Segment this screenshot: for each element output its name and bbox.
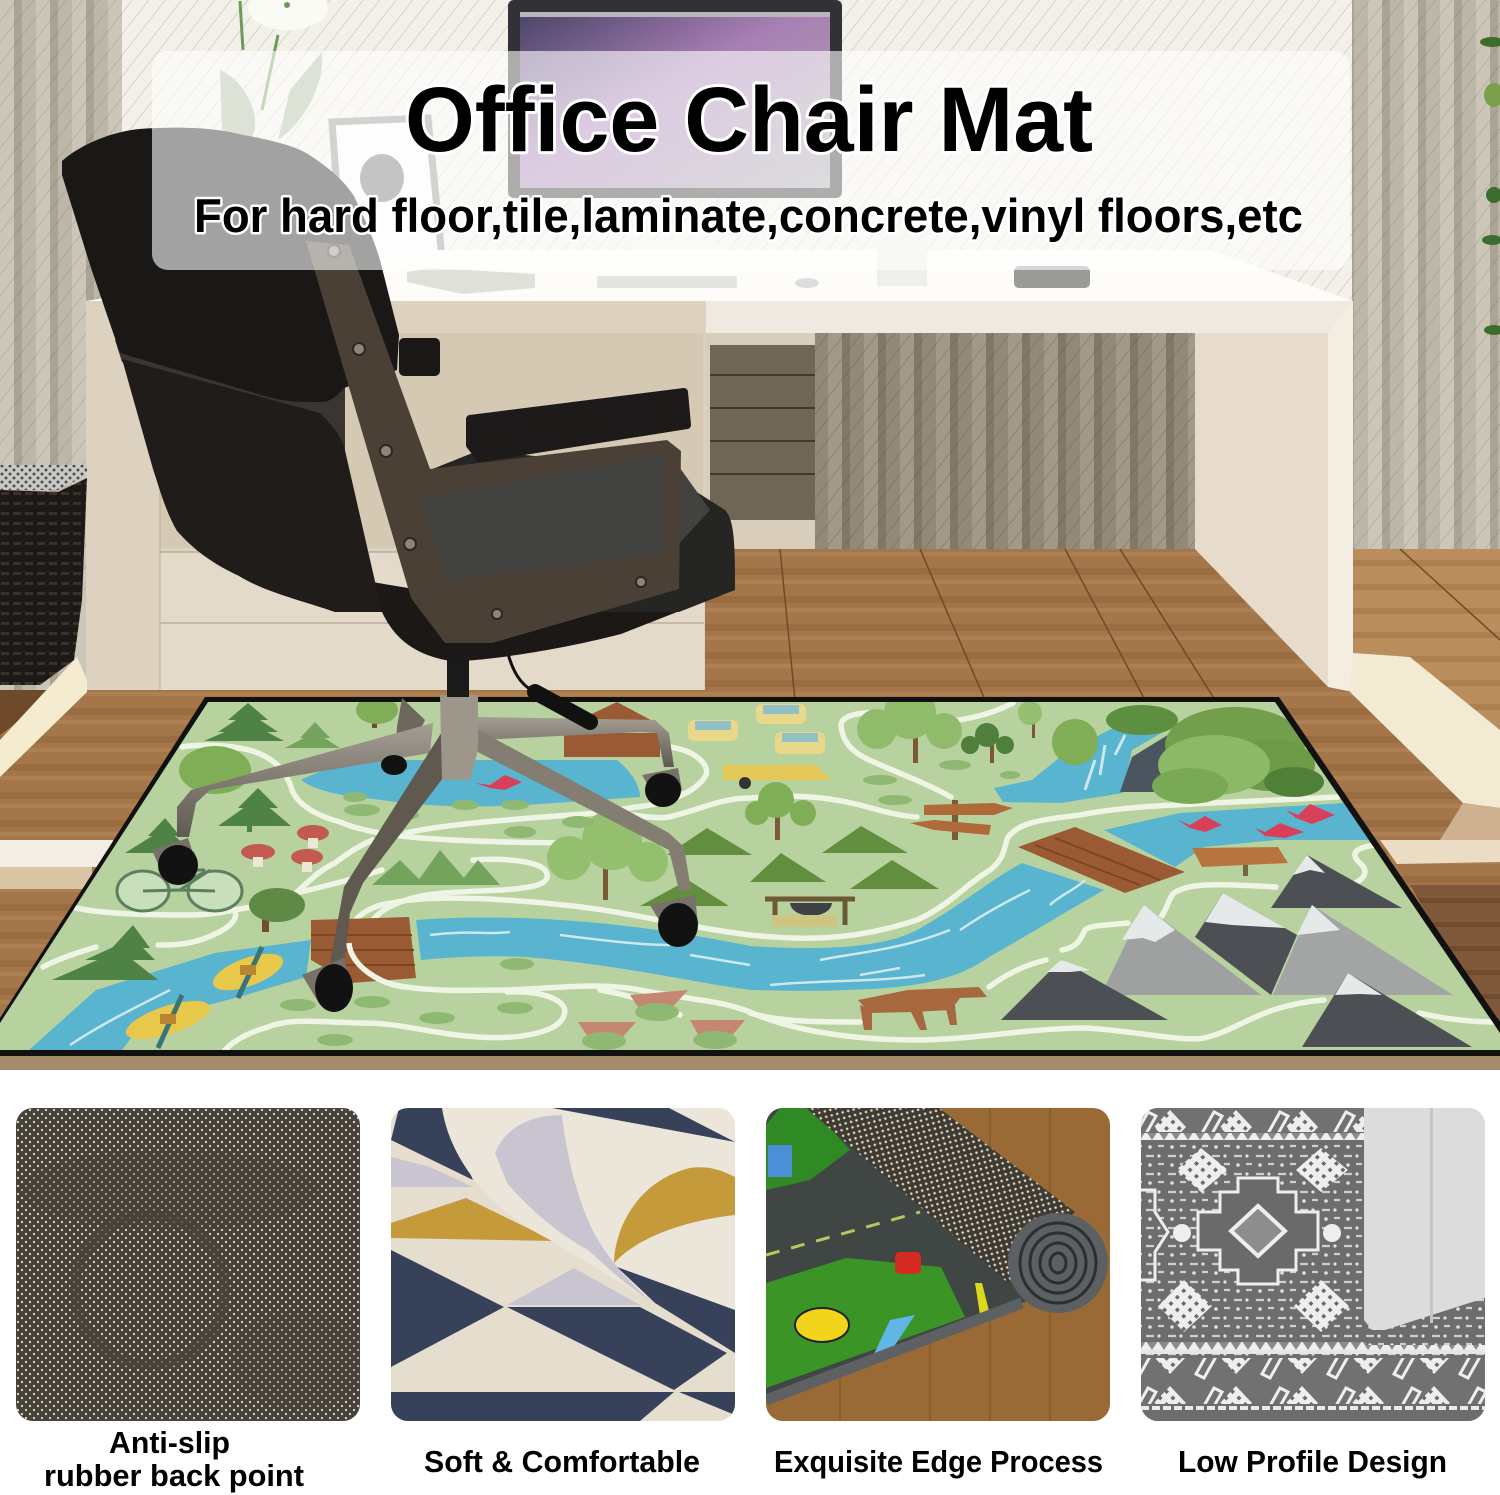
mushrooms <box>241 825 329 872</box>
subtitle: For hard floor,tile,laminate,concrete,vinyl floors,etc <box>194 189 1303 242</box>
chair mat with map <box>0 687 1500 1056</box>
sunlight right <box>1350 653 1500 864</box>
lower trim <box>1141 1342 1485 1350</box>
wicker basket <box>0 465 87 685</box>
title: Office Chair Mat <box>405 69 1093 171</box>
desk front <box>86 301 1353 333</box>
caption: anti-slip: Anti-slip <box>109 1425 230 1460</box>
moose <box>858 987 987 1030</box>
top trim <box>1141 1133 1366 1140</box>
bridge right <box>1018 827 1185 893</box>
caption: low profile: Low Profile Design <box>1178 1444 1447 1479</box>
bridge left <box>311 917 416 987</box>
curtain under desk <box>815 333 1195 549</box>
wall <box>0 0 1500 340</box>
desk top <box>86 250 1353 301</box>
pond <box>301 760 640 806</box>
signposts <box>910 800 1288 876</box>
sunlight left <box>0 657 113 889</box>
office chair <box>62 128 735 1012</box>
rear armrest <box>399 338 440 376</box>
translucent title panel <box>152 51 1350 270</box>
chair upper cushion <box>62 128 399 402</box>
gas lift and cable <box>447 650 590 722</box>
chair lower cushion <box>122 359 382 612</box>
left border motif <box>1141 1190 1168 1280</box>
kayaks <box>122 946 288 1048</box>
wall hatching <box>0 0 1500 590</box>
waterfall <box>994 728 1168 803</box>
tents <box>640 826 939 906</box>
casters <box>152 755 698 1012</box>
drawer unit <box>86 301 706 691</box>
river ripples <box>70 880 1085 1045</box>
central medallion <box>1173 1178 1341 1284</box>
panel: low profile tile <box>1141 1108 1485 1421</box>
panel: rubber back tile <box>16 1108 370 1421</box>
trees <box>179 687 1042 932</box>
front armrest <box>470 392 687 458</box>
chair cushion backing <box>115 340 345 450</box>
bronze frame <box>306 241 681 643</box>
monitor <box>508 0 842 270</box>
cabin <box>564 702 660 757</box>
river main <box>416 863 1104 991</box>
river upper right <box>1104 803 1372 867</box>
red fish <box>475 775 1335 838</box>
under seat <box>239 570 733 661</box>
mat map field <box>0 702 1500 1050</box>
pine trees <box>52 703 500 980</box>
chair star base <box>177 695 691 963</box>
picture frame <box>332 118 442 268</box>
river kayak <box>29 940 311 1050</box>
plant left <box>220 0 328 140</box>
right curtain <box>1352 0 1500 590</box>
plant right <box>1480 37 1500 335</box>
caption: edge: Exquisite Edge Process <box>774 1444 1103 1479</box>
top border band <box>1141 1108 1366 1132</box>
campfire <box>765 899 855 927</box>
rivets <box>328 245 646 619</box>
lower band <box>1141 1358 1485 1404</box>
wood shelf <box>705 333 815 549</box>
forest bushes <box>1052 705 1324 804</box>
room scene background <box>0 0 1500 1070</box>
mat border <box>0 697 1500 1056</box>
corner diamonds <box>1158 1148 1349 1332</box>
caption: anti-slip <box>44 1425 304 1493</box>
panel: soft geometric tile <box>391 1108 735 1421</box>
panel: edge process tile <box>766 1108 1110 1421</box>
caption: anti-slip: rubber back point <box>44 1458 304 1493</box>
campers and vans <box>688 704 832 789</box>
leaf sprigs <box>280 760 1020 1046</box>
seat cushion <box>420 450 735 612</box>
desk objects <box>407 240 1090 294</box>
left curtain <box>0 0 122 690</box>
caption: soft: Soft & Comfortable <box>424 1444 700 1479</box>
trails <box>43 703 1496 1050</box>
flower clusters <box>578 990 745 1050</box>
bicycle <box>117 870 242 911</box>
white door <box>1364 1108 1485 1345</box>
mountains <box>1001 855 1472 1047</box>
desk right leg <box>1195 301 1353 692</box>
wood floor <box>0 549 1500 1070</box>
